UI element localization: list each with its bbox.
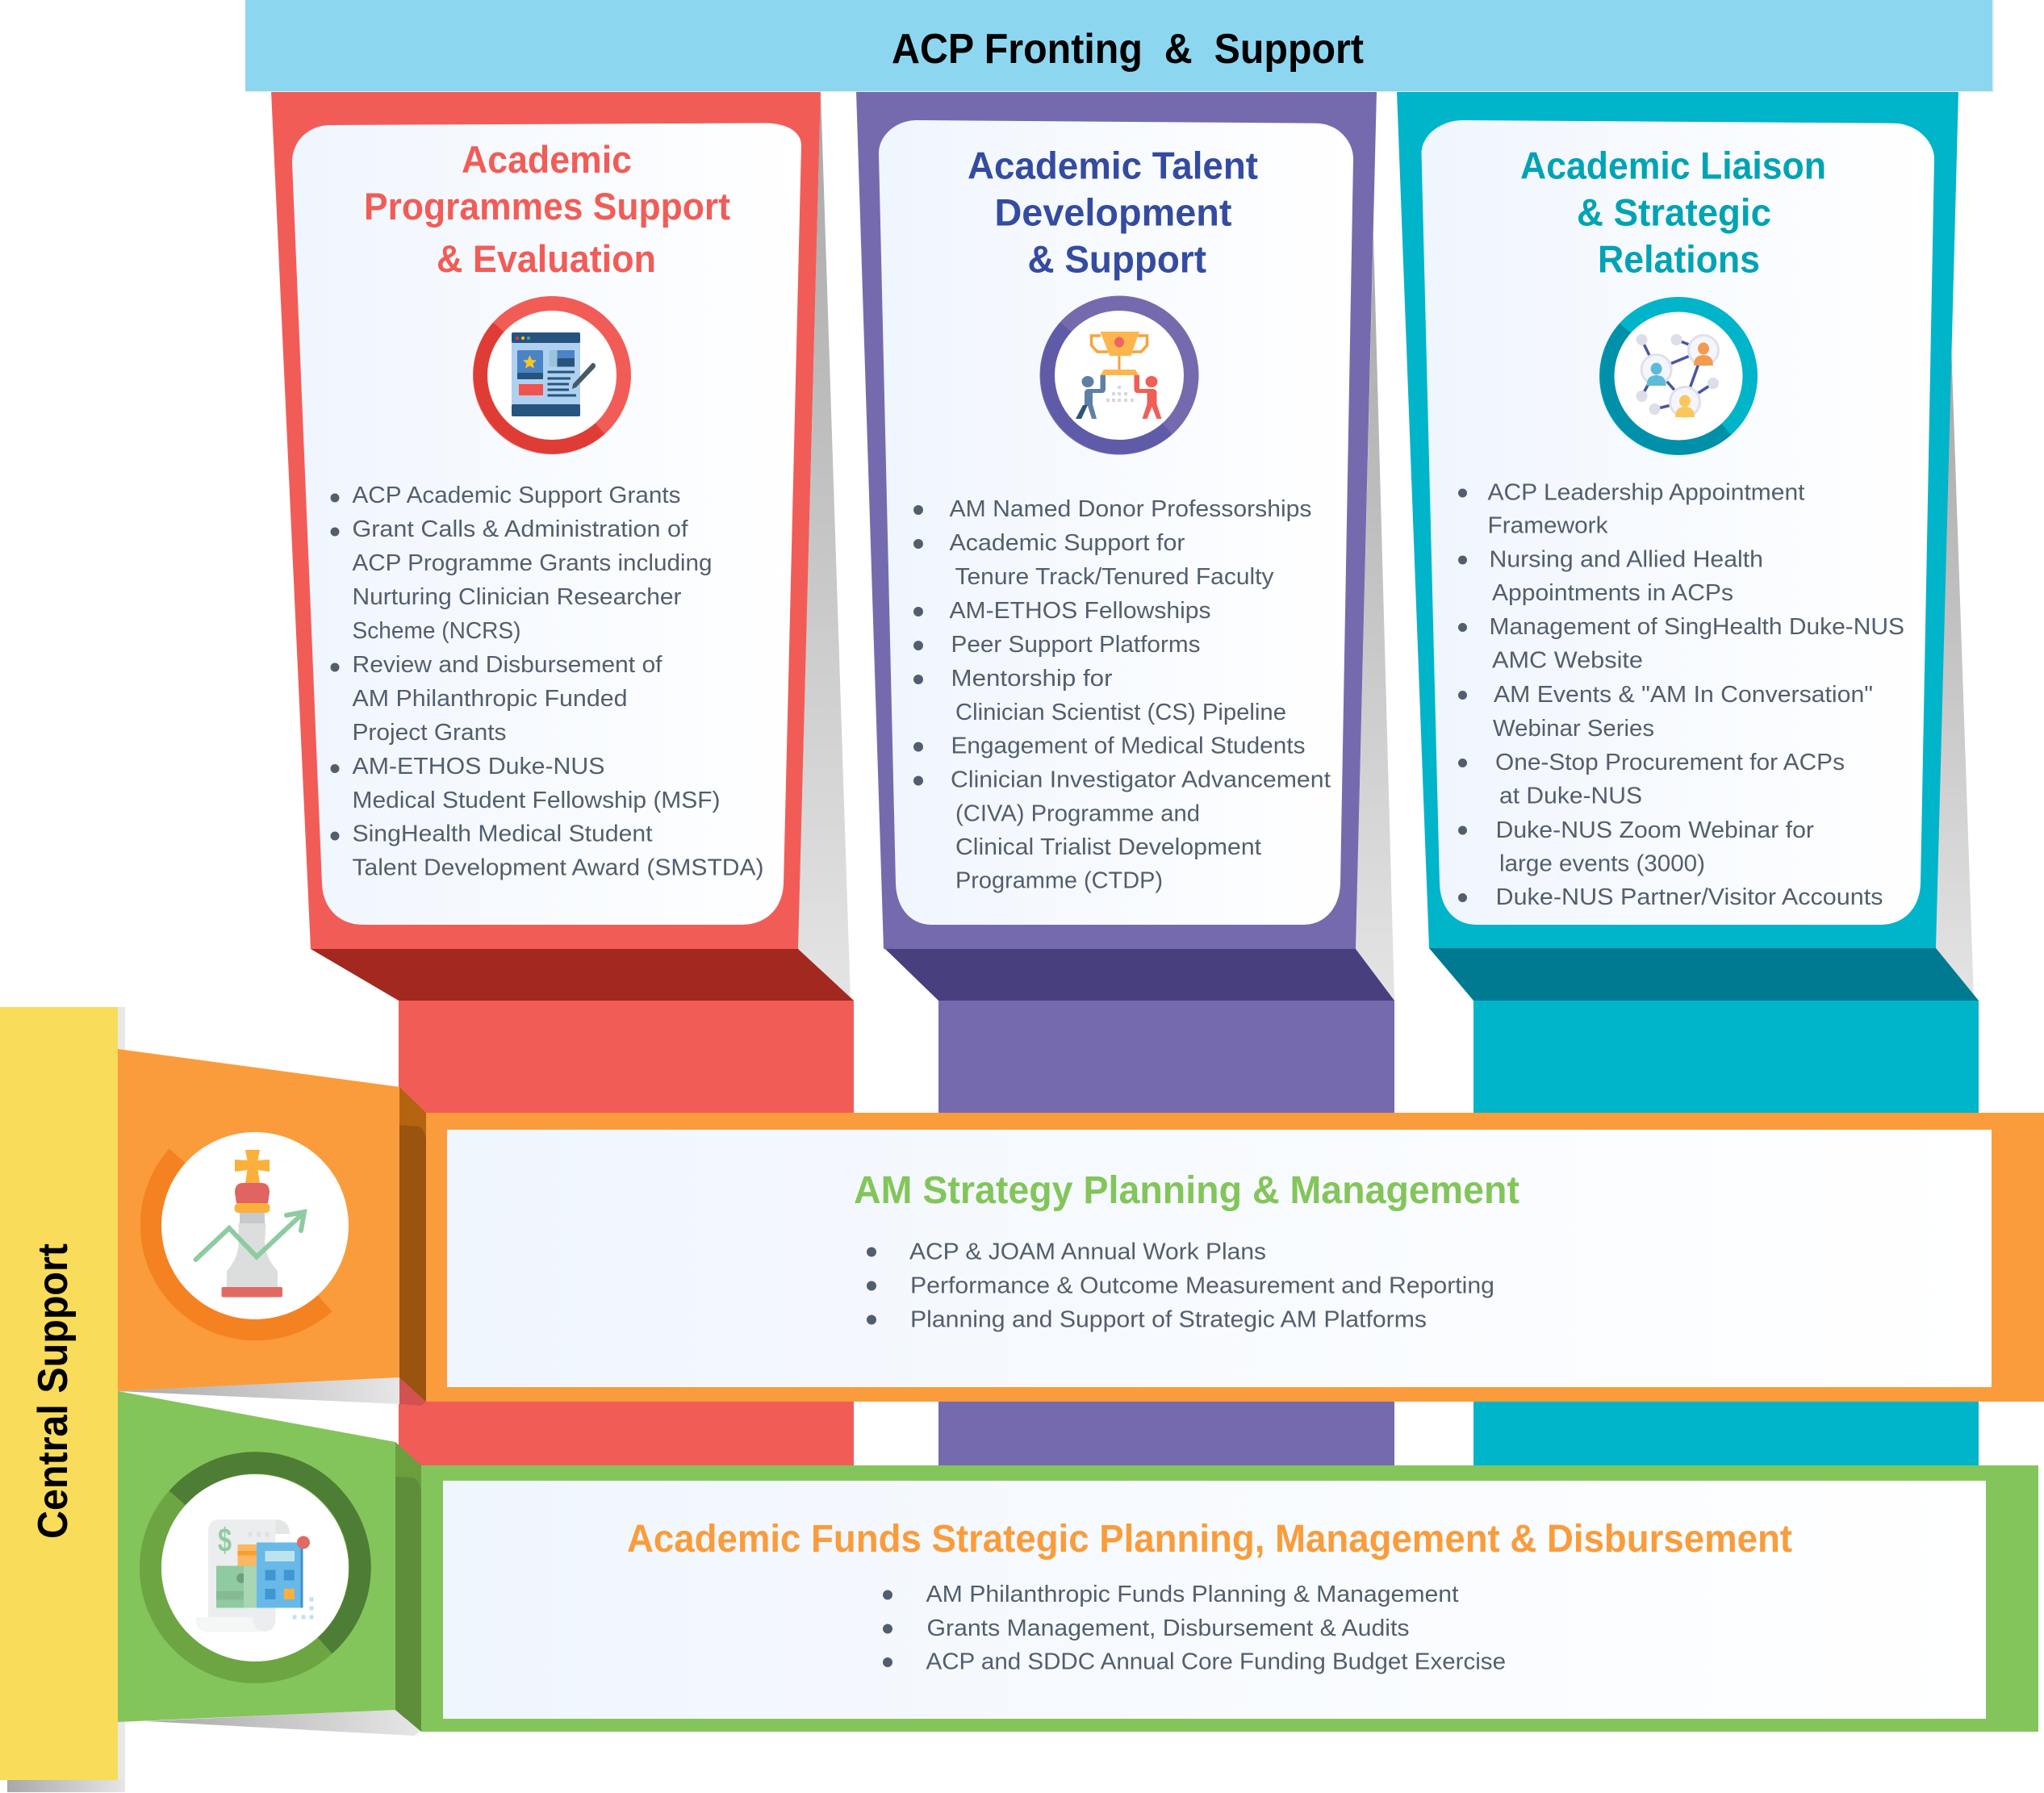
heading: academic talent development: Academic Talent [968, 144, 1258, 187]
top banner: ACP fronting and support: ACP Fronting & Support [892, 26, 1364, 73]
icon: document with pen in red ring [473, 296, 631, 454]
bullet list: academic talent: Clinician Scientist (CS) Pipeline [955, 700, 1286, 725]
bullet list: academic programmes: AM-ETHOS Duke-NUS [352, 754, 605, 779]
panel: AM strategy planning and management [118, 1049, 2044, 1406]
bullet list: academic talent: Clinician Investigator Advancement [951, 767, 1331, 792]
bullet list: academic programmes: ACP Academic Support Grants [352, 483, 681, 508]
bullet list: AM strategy: ACP & JOAM Annual Work Plans [909, 1239, 1266, 1265]
bullet list: academic talent: Academic Support for [949, 530, 1185, 556]
bullet list: academic talent: Programme (CTDP) [955, 868, 1163, 894]
bullet list: academic funds [883, 1582, 1506, 1675]
heading: academic funds: Academic Funds Strategic Planning, Management & Disbursement [627, 1518, 1792, 1561]
bullet list: academic liaison: Duke-NUS Zoom Webinar for [1496, 817, 1814, 843]
bullet list: academic talent: AM-ETHOS Fellowships [949, 598, 1210, 624]
bullet list: academic talent: AM Named Donor Professorships [949, 496, 1312, 522]
icon: two people lifting a trophy in purple ring [1039, 295, 1199, 455]
heading: academic programmes support [364, 138, 730, 280]
heading: academic liaison: & Strategic [1577, 190, 1771, 234]
bullet list: academic programmes: Grant Calls & Administration of [352, 516, 688, 542]
heading: AM strategy: AM Strategy Planning & Management [854, 1168, 1519, 1212]
bullet list: academic liaison: One-Stop Procurement for ACPs [1495, 750, 1845, 775]
central support side bar: Central Support [30, 1243, 77, 1539]
bullet list: academic liaison: at Duke-NUS [1499, 783, 1642, 809]
bullet list: academic liaison: Webinar Series [1493, 716, 1654, 742]
bullet list: academic funds: AM Philanthropic Funds Planning & Management [926, 1582, 1459, 1607]
bullet list: academic liaison: AMC Website [1492, 647, 1643, 673]
bullet list: academic liaison: Nursing and Allied Health [1490, 547, 1763, 573]
panel: academic talent development and support [856, 91, 1394, 1469]
bullet list: academic programmes [331, 483, 763, 881]
bullet list: academic talent: Tenure Track/Tenured Faculty [955, 564, 1274, 590]
bullet list: AM strategy [867, 1239, 1494, 1333]
bullet list: academic liaison: large events (3000) [1499, 851, 1705, 876]
panel: academic funds strategic planning [118, 1391, 2038, 1736]
bullet list: AM strategy: Planning and Support of Strategic AM Platforms [910, 1307, 1427, 1333]
heading: academic liaison: Academic Liaison [1520, 144, 1826, 187]
bullet list: academic talent: Peer Support Platforms [951, 632, 1201, 658]
bullet list: academic liaison: Duke-NUS Partner/Visitor Accounts [1496, 884, 1883, 910]
top banner: ACP fronting and support [245, 0, 1994, 92]
bullet list: academic liaison: AM Events & "AM In Conversation" [1494, 682, 1873, 708]
bullet list: academic liaison: Framework [1488, 513, 1608, 539]
bullet list: academic liaison [1458, 479, 1904, 910]
heading: academic programmes support: & Evaluation [437, 237, 656, 280]
bullet list: academic funds: Grants Management, Disbursement & Audits [926, 1615, 1409, 1641]
central support side bar [0, 1007, 125, 1792]
bullet list: academic programmes: Review and Disbursement of [352, 652, 663, 678]
heading: academic programmes support: Programmes Support [364, 185, 730, 228]
heading: academic talent development [968, 144, 1258, 281]
bullet list: academic programmes: Talent Development Award (SMSTDA) [352, 855, 763, 881]
bullet list: academic funds: ACP and SDDC Annual Core Funding Budget Exercise [926, 1649, 1506, 1675]
bullet list: academic programmes: Medical Student Fellowship (MSF) [352, 788, 720, 813]
bullet list: academic talent: Engagement of Medical Students [951, 733, 1306, 759]
heading: academic talent development: & Support [1028, 237, 1206, 281]
icon: chess king with rising arrow [151, 1132, 349, 1330]
bullet list: academic programmes: Scheme (NCRS) [352, 618, 521, 644]
icon: receipt, money and calculator [150, 1463, 360, 1672]
bullet list: academic talent: Mentorship for [951, 666, 1113, 692]
bullet list: AM strategy: Performance & Outcome Measurement and Reporting [910, 1273, 1494, 1299]
bullet list: academic programmes: Nurturing Clinician Researcher [352, 584, 682, 610]
panel: academic liaison and strategic relations [1397, 91, 1979, 1469]
bullet list: academic talent [913, 496, 1331, 894]
bullet list: academic programmes: AM Philanthropic Funded [352, 686, 628, 712]
bullet list: academic programmes: SingHealth Medical Student [352, 821, 652, 847]
bullet list: academic programmes: Project Grants [352, 720, 507, 746]
icon: people network in teal ring [1599, 297, 1758, 455]
heading: academic liaison: Relations [1598, 237, 1760, 281]
bullet list: academic programmes: ACP Programme Grants including [352, 550, 712, 576]
panel: academic programmes support and evaluation [271, 91, 854, 1719]
bullet list: academic liaison: Management of SingHealth Duke-NUS [1490, 614, 1904, 640]
bullet list: academic talent: (CIVA) Programme and [955, 800, 1200, 826]
bullet list: academic liaison: ACP Leadership Appointment [1488, 479, 1804, 505]
heading: academic programmes support: Academic [462, 138, 632, 181]
heading: academic liaison [1520, 144, 1826, 281]
bullet list: academic liaison: Appointments in ACPs [1492, 580, 1733, 606]
bullet list: academic talent: Clinical Trialist Development [955, 834, 1261, 860]
icon: receipt, money and calculator: $ [218, 1521, 232, 1559]
heading: academic talent development: Development [994, 190, 1232, 234]
